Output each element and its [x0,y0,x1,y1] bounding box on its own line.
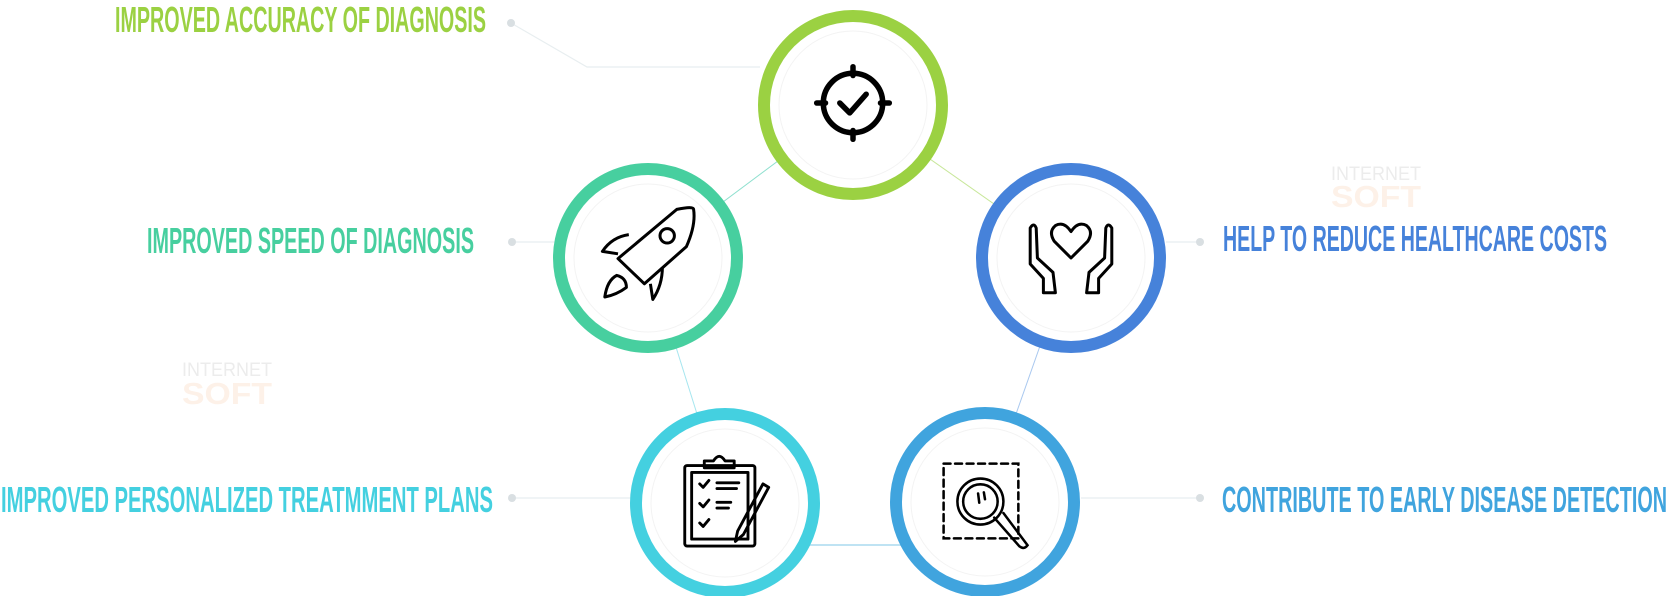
leader lines [511,23,1200,498]
circle: speed [559,169,737,347]
circle: personalized [636,414,814,592]
watermark left [182,360,272,411]
leader dots [507,19,1204,502]
watermark right: SOFT [1331,179,1421,214]
label: speed: IMPROVED SPEED OF DIAGNOSIS [147,220,474,261]
icon: rocket [602,208,694,299]
circle: costs [982,169,1160,347]
icon: magnifier [944,464,1028,548]
watermark left: INTERNET [182,360,272,381]
watermark left: SOFT [182,376,272,411]
watermark right [1331,164,1421,214]
watermark right: INTERNET [1331,164,1421,185]
circle: accuracy [764,16,942,194]
icon: hands heart [1030,224,1112,293]
icon: clipboard [685,456,769,546]
label: accuracy: IMPROVED ACCURACY OF DIAGNOSIS [115,0,486,40]
label: personalized: IMPROVED PERSONALIZED TREATMMENT PLANS [1,479,493,520]
circle: early detection [896,413,1074,591]
connector lines between circles [648,105,1071,545]
icon: target check [817,67,889,139]
